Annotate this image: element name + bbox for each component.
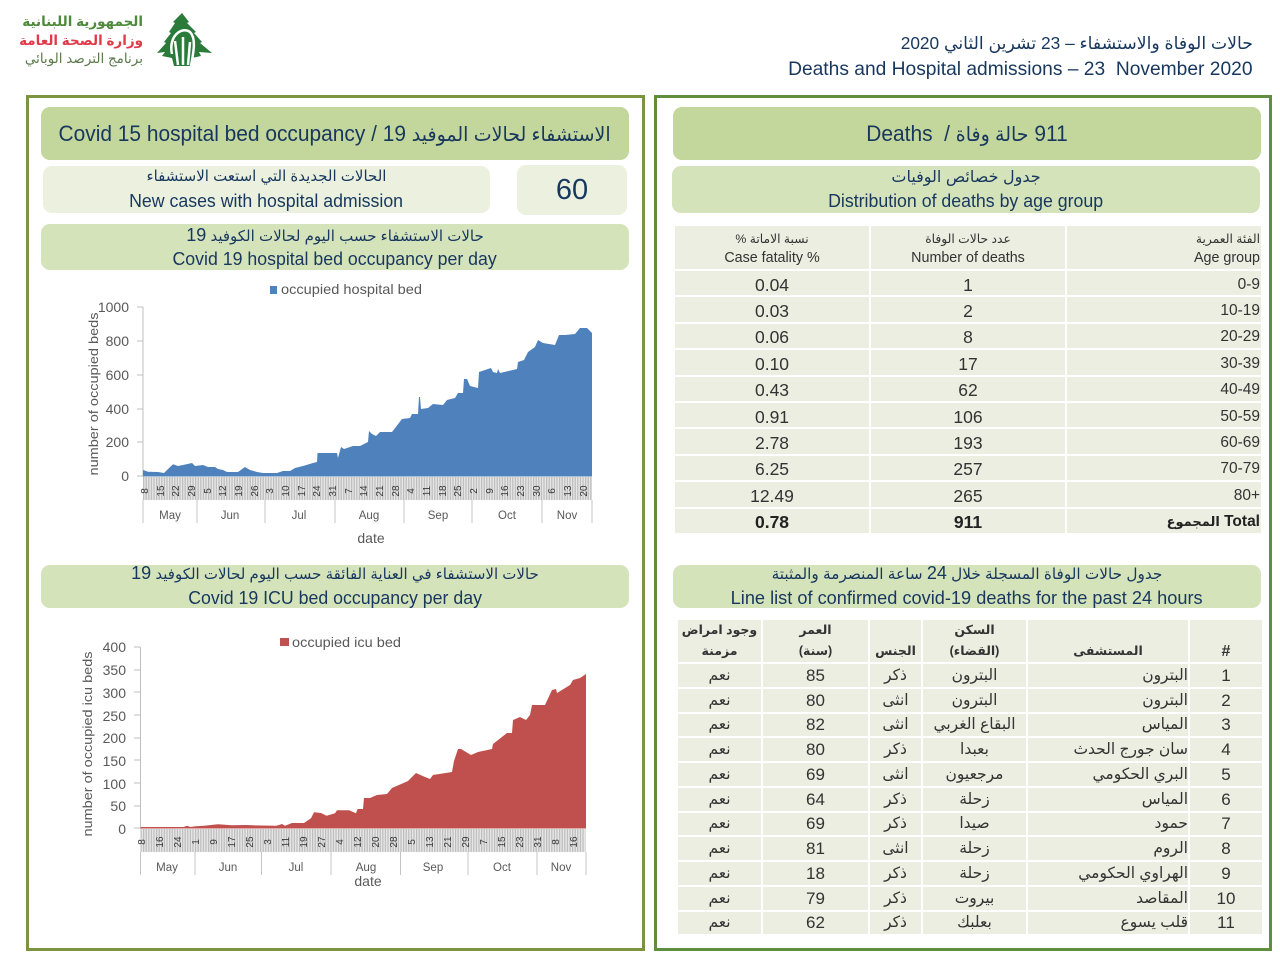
table: line list of deaths: انثى	[882, 692, 909, 709]
table: line list of deaths: نعم	[708, 766, 731, 783]
table: line list of deaths: 4	[1221, 740, 1231, 759]
panel: deaths	[654, 95, 1272, 951]
table: line list of deaths: انثى	[882, 840, 909, 857]
x axis dates: 6	[547, 488, 558, 494]
x axis months: Sep	[423, 862, 443, 874]
table: line list of deaths: نعم	[708, 791, 731, 808]
x axis dates: 1	[191, 839, 202, 845]
table: line list of deaths: 1	[1221, 666, 1231, 685]
table: deaths by age group: 8	[963, 327, 973, 347]
x axis months: Aug	[359, 510, 379, 522]
x axis months: Jun	[219, 862, 237, 874]
heading: hospital occupancy per day: حالات الاستشفاء حسب اليوم لحالات الكوفيد 19	[186, 225, 484, 245]
heading: hospital occupancy per day: Covid 19 hospital bed occupancy per day	[173, 249, 497, 269]
table: deaths by age group: 0.91	[755, 407, 789, 427]
table: line list of deaths: البترون	[1142, 692, 1188, 709]
table: line list of deaths: الهراوي الحكومي	[1078, 865, 1188, 882]
x axis dates: 17	[227, 836, 238, 848]
table: deaths by age group: 30-39	[1220, 355, 1260, 372]
table: line list of deaths: نعم	[708, 890, 731, 907]
x axis dates: 8	[140, 488, 151, 494]
x axis months	[140, 852, 586, 875]
table: line list of deaths: 80	[806, 691, 825, 710]
table: line list of deaths: المياس	[1142, 716, 1188, 733]
table: line list of deaths: بيروت	[955, 890, 994, 907]
x axis months: Jul	[289, 862, 303, 874]
heading: hospital bed occupancy: الاستشفاء لحالات الموفيد 19 / Covid 15 hospital bed occupancy	[59, 121, 611, 146]
logo text: الجمهورية اللبنانية	[22, 14, 143, 29]
y axis: 250	[103, 708, 126, 724]
table: line list of deaths	[678, 620, 1262, 934]
x axis dates: 18	[438, 485, 449, 497]
logo text	[19, 14, 143, 66]
table: line list of deaths: #	[1222, 643, 1230, 660]
heading: hospital bed occupancy	[41, 107, 629, 160]
x axis dates: 11	[422, 485, 433, 496]
x axis dates: 7	[344, 488, 355, 494]
x axis dates: 20	[579, 485, 590, 497]
logo text: وزارة الصحة العامة	[19, 32, 143, 48]
x axis dates: 31	[328, 485, 339, 497]
table: deaths by age group: 0.43	[755, 380, 789, 400]
x axis dates: 2	[469, 488, 480, 494]
x axis dates: 12	[218, 485, 229, 497]
x axis dates: 3	[263, 839, 274, 845]
table: deaths by age group: 0.78	[755, 512, 789, 532]
table: line list of deaths: 64	[806, 790, 825, 809]
table: deaths by age group: Case fatality %	[724, 250, 820, 266]
page title	[789, 33, 1253, 80]
y axis: 50	[110, 798, 126, 814]
x axis dates: 4	[406, 488, 417, 494]
x axis dates: 4	[335, 839, 346, 845]
x axis dates: 14	[359, 485, 370, 497]
x axis dates: 9	[209, 839, 220, 845]
heading: line list: جدول حالات الوفاة المسجلة خلال 24 ساعة المنصرمة والمثبتة	[772, 563, 1162, 583]
x axis dates: 9	[485, 488, 496, 494]
table: line list of deaths: نعم	[708, 914, 731, 931]
table: line list of deaths: العمر	[799, 623, 832, 637]
y axis: 1000	[98, 299, 129, 315]
x axis dates: 28	[389, 836, 400, 848]
x axis dates: 29	[187, 485, 198, 497]
table: line list of deaths: 7	[1221, 814, 1231, 833]
table: deaths by age group: 80+	[1234, 487, 1260, 504]
table: line list of deaths: (القضاء)	[950, 644, 999, 658]
legend: occupied icu bed	[292, 634, 401, 650]
table: line list of deaths: بعلبك	[957, 914, 992, 931]
x axis dates: 5	[407, 839, 418, 845]
heading: distribution by age	[672, 166, 1260, 213]
table: deaths by age group: 17	[958, 354, 978, 374]
y axis: 200	[103, 730, 126, 746]
table: line list of deaths: (سنة)	[799, 644, 832, 658]
x axis dates: 21	[375, 485, 386, 497]
table: line list of deaths: البترون	[1142, 667, 1188, 684]
x axis title: date	[357, 530, 385, 546]
heading: deaths: 911 حالة وفاة / Deaths	[866, 121, 1068, 146]
table: deaths by age group: 0-9	[1238, 276, 1260, 293]
table: line list of deaths: البترون	[952, 667, 997, 684]
table: deaths by age group: 911	[954, 512, 982, 532]
table: deaths by age group: Age group	[1194, 250, 1260, 266]
table: line list of deaths: 69	[806, 814, 825, 833]
x axis months: Jun	[221, 510, 239, 522]
table: line list of deaths: نعم	[708, 815, 731, 832]
y axis: 350	[103, 662, 126, 678]
table: deaths by age group: 0.06	[755, 327, 789, 347]
x axis months: Jul	[292, 510, 306, 522]
x axis dates: 13	[563, 485, 574, 497]
table: deaths by age group: 60-69	[1220, 434, 1260, 451]
x axis dates: 24	[312, 485, 323, 497]
table: line list of deaths: ذكر	[884, 791, 907, 808]
table: line list of deaths: 5	[1221, 765, 1231, 784]
y axis: 300	[103, 685, 126, 701]
x axis dates: 22	[171, 485, 182, 497]
table: line list of deaths: ذكر	[884, 741, 907, 758]
table: deaths by age group: 193	[953, 433, 983, 453]
label: new cases with hospital admission	[43, 166, 490, 213]
x axis dates: 25	[245, 836, 256, 848]
x axis dates: 21	[443, 836, 454, 848]
heading: hospital occupancy per day	[41, 224, 629, 270]
table: deaths by age group: عدد حالات الوفاة	[925, 232, 1011, 246]
table: line list of deaths: وجود امراض	[682, 623, 757, 637]
x axis dates: 28	[391, 485, 402, 497]
table: deaths by age group: 50-59	[1220, 408, 1260, 425]
table: line list of deaths: مزمنة	[702, 644, 737, 658]
table: line list of deaths: ذكر	[884, 815, 907, 832]
table: line list of deaths: سان جورج الحدث	[1073, 741, 1188, 758]
table: line list of deaths: نعم	[708, 741, 731, 758]
table: line list of deaths: 11	[1217, 913, 1235, 932]
x axis dates: 16	[500, 485, 511, 497]
area: occupied ICU beds	[141, 674, 586, 828]
x axis months: May	[156, 862, 178, 874]
table: line list of deaths: البري الحكومي	[1092, 766, 1188, 783]
table: deaths by age group: 12.49	[750, 486, 794, 506]
x axis dates: 27	[317, 836, 328, 848]
table: line list of deaths: ذكر	[884, 865, 907, 882]
table: line list of deaths: مرجعيون	[946, 766, 1003, 783]
table: line list of deaths: 80	[806, 740, 825, 759]
table: deaths by age group	[675, 226, 1261, 533]
y axis: 200	[106, 434, 129, 450]
table: line list of deaths: المقاصد	[1136, 890, 1188, 907]
table: line list of deaths: 3	[1221, 715, 1231, 734]
table: deaths by age group: 6.25	[755, 459, 789, 479]
table: deaths by age group: 0.04	[755, 275, 789, 295]
table: deaths by age group: 40-49	[1220, 381, 1260, 398]
x axis months: Oct	[498, 510, 517, 522]
heading: ICU occupancy per day: Covid 19 ICU bed occupancy per day	[188, 588, 482, 608]
x axis dates: 8	[137, 839, 148, 845]
table: line list of deaths: 2	[1221, 691, 1231, 710]
table: line list of deaths: 18	[806, 864, 825, 883]
y axis: 400	[103, 639, 126, 655]
x axis dates: 3	[265, 488, 276, 494]
y axis: number of occupied icu beds	[80, 651, 95, 837]
table: line list of deaths: نعم	[708, 667, 731, 684]
label: new cases with hospital admission: الحالات الجديدة التي استعت الاستشفاء	[147, 168, 386, 185]
table: line list of deaths: السكن	[954, 623, 995, 637]
icon: cedar tree	[157, 13, 212, 66]
y axis: 600	[106, 367, 129, 383]
table: deaths by age group: 62	[958, 380, 978, 400]
x axis dates: 17	[297, 485, 308, 497]
y axis: 800	[106, 333, 129, 349]
heading: distribution by age: جدول خصائص الوفيات	[891, 169, 1041, 186]
x axis months	[143, 500, 592, 523]
table: deaths by age group: 70-79	[1220, 460, 1260, 477]
table: deaths by age group: نسبة الاماتة %	[735, 232, 809, 246]
x axis dates: 5	[203, 488, 214, 494]
table: line list of deaths: 6	[1221, 790, 1231, 809]
table: line list of deaths: ذكر	[884, 667, 907, 684]
y axis: 0	[121, 468, 129, 484]
x axis dates	[140, 477, 592, 500]
panel: hospital occupancy	[26, 95, 645, 951]
heading: deaths	[673, 107, 1261, 160]
x axis dates: 13	[425, 836, 436, 848]
logo text: برنامج الترصد الوبائي	[25, 51, 143, 66]
table: line list of deaths: الروم	[1153, 840, 1188, 857]
table: line list of deaths: 69	[806, 765, 825, 784]
table: line list of deaths: 79	[806, 889, 825, 908]
stat: new admissions: 60	[556, 174, 588, 206]
x axis dates: 23	[515, 836, 526, 848]
x axis dates	[137, 829, 586, 852]
table: line list of deaths: 81	[806, 839, 825, 858]
table: deaths by age group: 265	[953, 486, 983, 506]
x axis dates: 31	[533, 836, 544, 848]
heading: ICU occupancy per day	[41, 565, 629, 608]
page title: Deaths and Hospital admissions – 23 November 2020	[789, 58, 1253, 80]
table: deaths by age group: 20-29	[1220, 328, 1260, 345]
table: deaths by age group: Number of deaths	[911, 250, 1025, 266]
heading: distribution by age: Distribution of deaths by age group	[829, 191, 1103, 211]
x axis dates: 15	[156, 485, 167, 497]
table: line list of deaths: 82	[806, 715, 825, 734]
table: line list of deaths: انثى	[882, 716, 909, 733]
table: line list of deaths: المياس	[1142, 791, 1188, 808]
table: deaths by age group: 106	[953, 407, 983, 427]
y axis	[86, 299, 143, 484]
table: deaths by age group: 0.03	[755, 301, 789, 321]
label: new cases with hospital admission: New cases with hospital admission	[130, 191, 403, 211]
area: occupied hospital beds	[143, 328, 592, 476]
x axis dates: 19	[299, 836, 310, 848]
table: line list of deaths: البترون	[952, 692, 997, 709]
table: deaths by age group: 10-19	[1220, 302, 1260, 319]
table: line list of deaths: المستشفى	[1073, 644, 1143, 658]
table: deaths by age group: 257	[953, 459, 983, 479]
x axis title: date	[354, 873, 382, 889]
y axis: 100	[103, 776, 126, 792]
table: line list of deaths: انثى	[882, 766, 909, 783]
table: line list of deaths: 9	[1221, 864, 1231, 883]
table: line list of deaths: 62	[806, 913, 825, 932]
x axis dates: 19	[234, 485, 245, 497]
table: deaths by age group: المجموع Total	[1167, 513, 1260, 530]
x axis months: Sep	[428, 510, 448, 522]
x axis dates: 16	[155, 836, 166, 848]
table: line list of deaths: زحلة	[959, 840, 990, 857]
table: line list of deaths: 85	[806, 666, 825, 685]
table: line list of deaths: نعم	[708, 840, 731, 857]
table: line list of deaths: نعم	[708, 692, 731, 709]
y axis: 150	[103, 753, 126, 769]
table: line list of deaths: زحلة	[959, 791, 990, 808]
legend: occupied hospital bed	[281, 281, 422, 297]
table: deaths by age group: الفئة العمرية	[1196, 232, 1260, 246]
x axis months: Nov	[551, 862, 571, 874]
x axis months: Nov	[557, 510, 577, 522]
table: line list of deaths: بعبدا	[960, 741, 989, 758]
table: line list of deaths: قلب يسوع	[1121, 914, 1188, 931]
table: line list of deaths: 8	[1221, 839, 1231, 858]
logo	[19, 13, 212, 66]
heading: line list	[673, 565, 1261, 608]
table: line list of deaths: ذكر	[884, 890, 907, 907]
page title: حالات الوفاة والاستشفاء – 23 تشرين الثاني 2020	[901, 33, 1253, 53]
chart: occupied hospital beds	[86, 281, 592, 546]
table: line list of deaths: 10	[1217, 889, 1235, 908]
table: deaths by age group: 1	[963, 275, 973, 295]
x axis dates: 15	[497, 836, 508, 848]
table: line list of deaths: ذكر	[884, 914, 907, 931]
y axis: 0	[118, 821, 126, 837]
y axis	[80, 639, 140, 837]
table: line list of deaths: صيدا	[959, 815, 990, 832]
x axis dates: 10	[281, 485, 292, 497]
x axis dates: 16	[569, 836, 580, 848]
table: line list of deaths: زحلة	[959, 865, 990, 882]
x axis dates: 11	[281, 836, 292, 847]
y axis: number of occupied beds	[86, 312, 101, 476]
x axis dates: 26	[250, 485, 261, 497]
x axis dates: 24	[173, 836, 184, 848]
table: line list of deaths: نعم	[708, 716, 731, 733]
table: deaths by age group: 2	[963, 301, 973, 321]
heading: ICU occupancy per day: حالات الاستشفاء في العناية الفائقة حسب اليوم لحالات الكوفيد 19	[131, 563, 539, 583]
y axis: 400	[106, 401, 129, 417]
x axis dates: 30	[532, 485, 543, 497]
table: deaths by age group: 0.10	[755, 354, 789, 374]
x axis months: Aug	[356, 862, 376, 874]
x axis dates: 7	[479, 839, 490, 845]
x axis dates: 25	[453, 485, 464, 497]
x axis dates: 20	[371, 836, 382, 848]
heading: line list: Line list of confirmed covid-19 deaths for the past 24 hours	[731, 588, 1203, 608]
x axis dates: 23	[516, 485, 527, 497]
stat: new admissions	[517, 165, 627, 215]
table: line list of deaths: حمود	[1155, 815, 1188, 832]
x axis dates: 12	[353, 836, 364, 848]
x axis dates: 8	[551, 839, 562, 845]
table: line list of deaths: الجنس	[875, 644, 916, 658]
table: line list of deaths: البقاع الغربي	[933, 716, 1016, 733]
table: deaths by age group: 2.78	[755, 433, 789, 453]
table: line list of deaths: نعم	[708, 865, 731, 882]
x axis months: Oct	[493, 862, 512, 874]
x axis dates: 29	[461, 836, 472, 848]
x axis months: May	[159, 510, 181, 522]
